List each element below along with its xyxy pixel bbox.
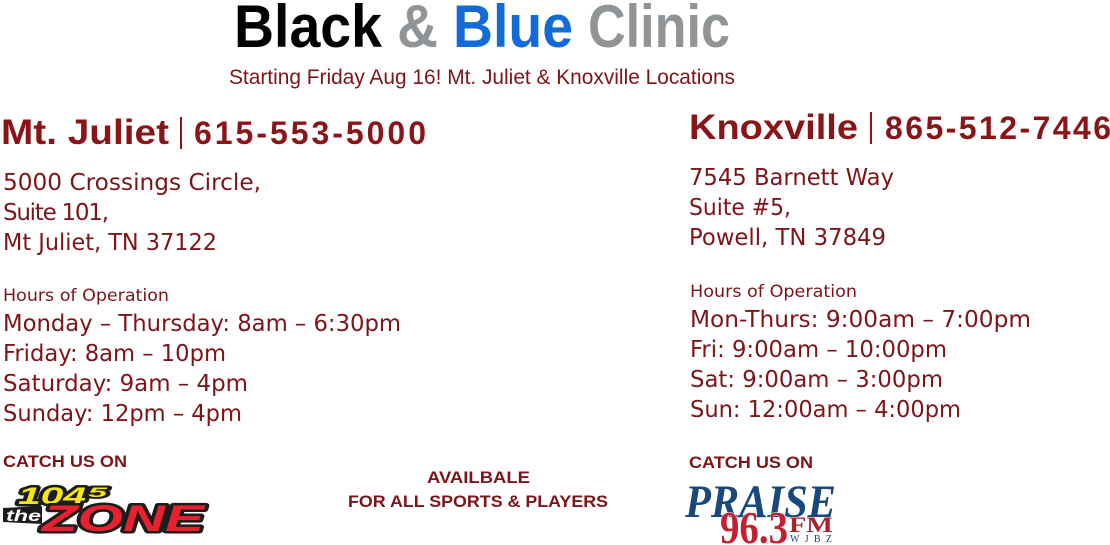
icon: Praise 96.3 FM logo: PRAISE [684, 476, 836, 528]
icon: 104.5 The Zone logo: ZONE [40, 498, 206, 539]
panel: Mt. Juliet location [1, 113, 426, 539]
panel: availability note: FOR ALL SPORTS & PLAYERS [348, 492, 608, 511]
icon: Praise 96.3 FM logo [684, 476, 836, 545]
panel: availability note: AVAILBALE [427, 468, 530, 487]
hours: Knoxville: Fri: 9:00am – 10:00pm [690, 337, 947, 363]
heading: Mt. Juliet phone: 615-553-5000 [194, 115, 426, 151]
heading: Knoxville phone [689, 108, 1110, 147]
icon: 104.5 The Zone logo: the [6, 508, 41, 525]
icon: Praise 96.3 FM logo: WJBZ [790, 534, 832, 545]
address: Mt. Juliet: Suite 101, [3, 200, 109, 226]
hours: Mt. Juliet: Saturday: 9am – 4pm [3, 371, 248, 397]
hours: Knoxville: Sat: 9:00am – 3:00pm [690, 367, 943, 393]
hours: Mt. Juliet: Hours of Operation [3, 286, 169, 306]
heading: Knoxville phone: 865-512-7446 [885, 110, 1110, 146]
address: Mt. Juliet: Mt Juliet, TN 37122 [3, 230, 217, 256]
address: Knoxville: Suite #5, [689, 195, 791, 221]
panel: availability note [348, 468, 608, 511]
hours: Knoxville [690, 282, 1031, 423]
address: Knoxville: 7545 Barnett Way [689, 165, 894, 191]
icon: 104.5 The Zone logo [3, 483, 206, 539]
heading: Knoxville phone: Knoxville [689, 108, 858, 147]
subtitle: Starting Friday Aug 16! Mt. Juliet & Knoxville Locations [229, 66, 735, 89]
hours: Knoxville: Mon-Thurs: 9:00am – 7:00pm [690, 307, 1031, 333]
hours: Mt. Juliet [3, 286, 401, 427]
hours: Knoxville: Hours of Operation [690, 282, 857, 302]
hours: Mt. Juliet: Friday: 8am – 10pm [3, 341, 226, 367]
icon: Praise 96.3 FM logo: FM [789, 512, 833, 537]
heading: Mt. Juliet phone: Mt. Juliet [1, 113, 169, 152]
heading: Mt. Juliet phone [1, 113, 426, 152]
address: Knoxville: Powell, TN 37849 [689, 225, 886, 251]
address: Knoxville [689, 165, 894, 251]
panel: Knoxville location [684, 108, 1110, 545]
icon: 104.5 The Zone logo: 104 [18, 483, 86, 510]
address: Mt. Juliet: 5000 Crossings Circle, [3, 170, 261, 196]
catch us on: Knoxville: CATCH US ON [689, 453, 813, 472]
hours: Mt. Juliet: Monday – Thursday: 8am – 6:30pm [3, 311, 401, 337]
address: Mt. Juliet [3, 170, 261, 256]
catch us on: Mt. Juliet: CATCH US ON [3, 452, 127, 471]
hours: Mt. Juliet: Sunday: 12pm – 4pm [3, 401, 242, 427]
hours: Knoxville: Sun: 12:00am – 4:00pm [690, 397, 961, 423]
icon: 104.5 The Zone logo: 5 [88, 484, 107, 500]
title [234, 0, 730, 60]
